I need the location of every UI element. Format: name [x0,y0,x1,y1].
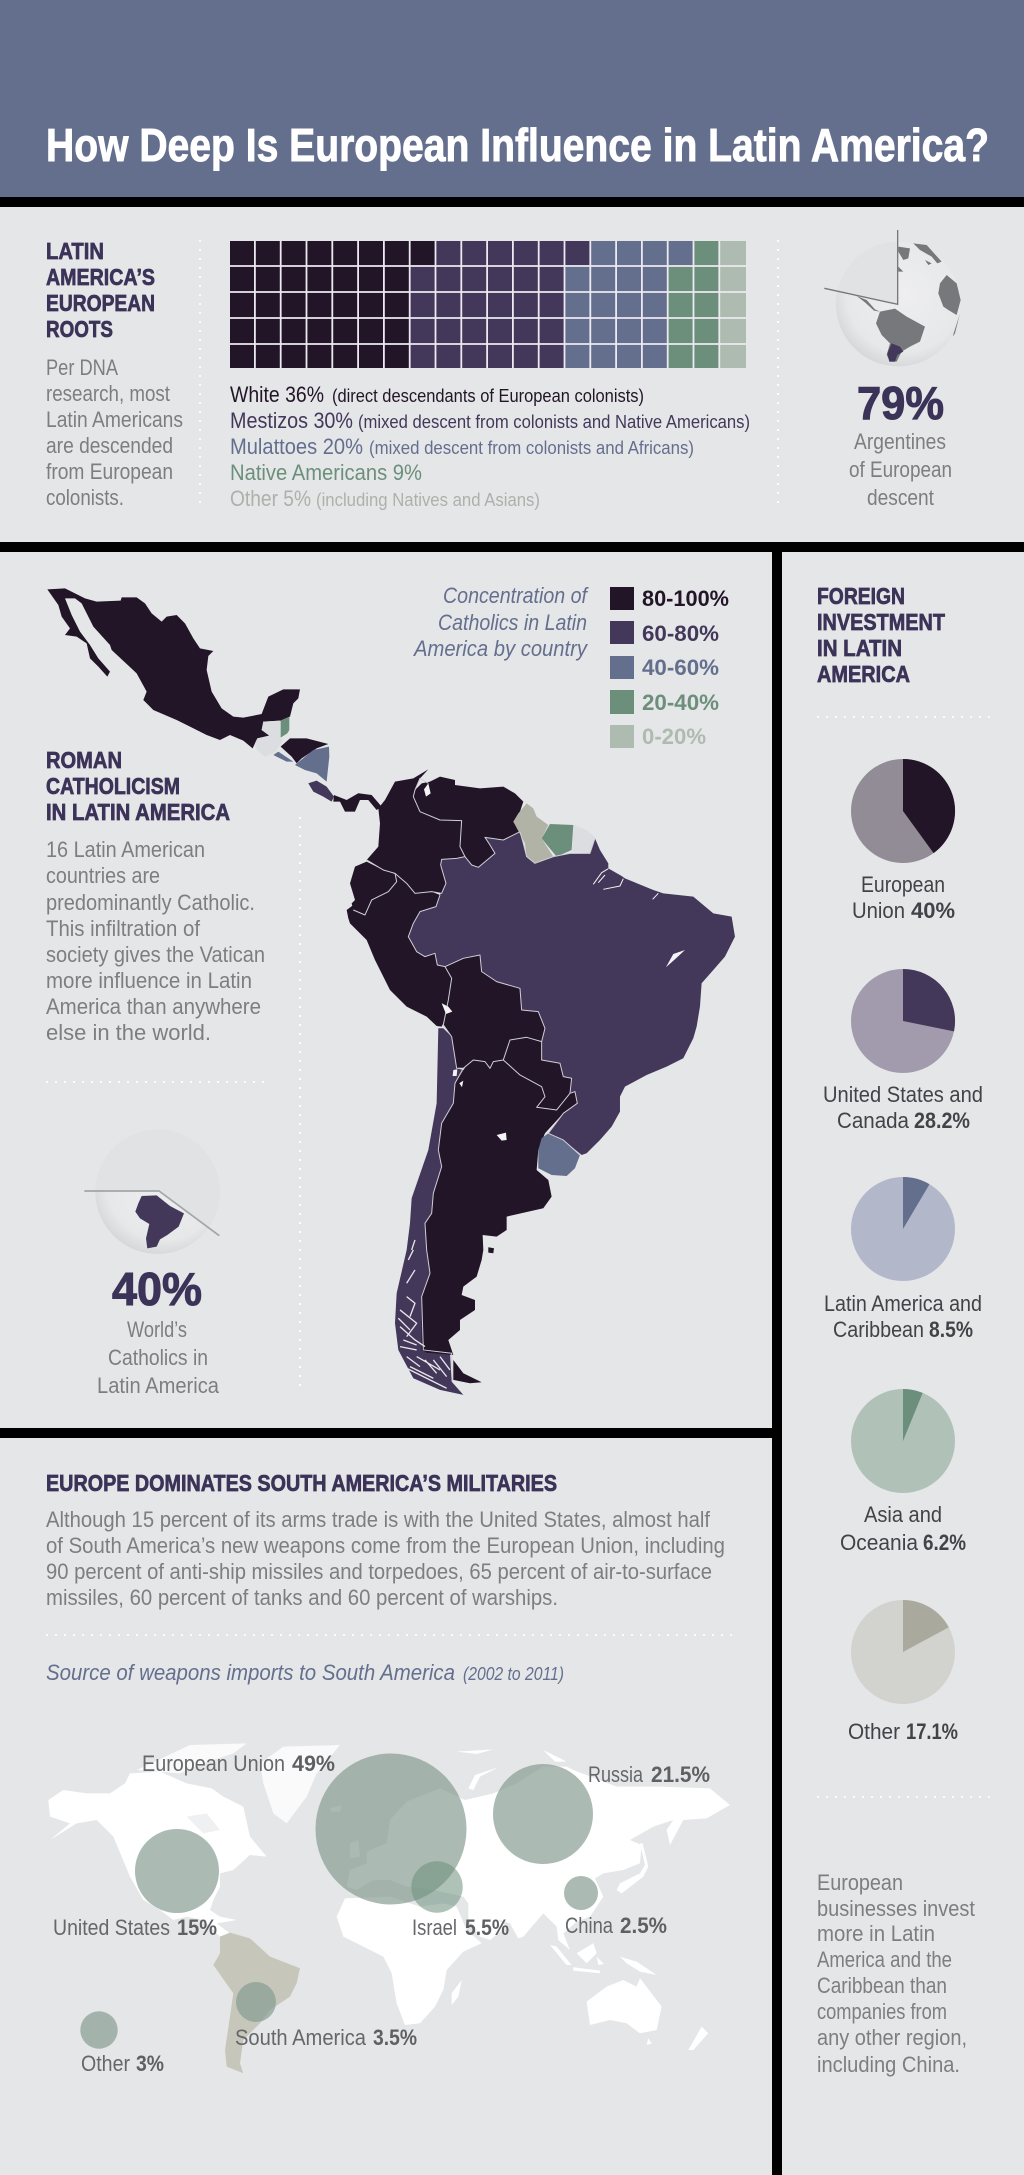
bubble labels [53,1751,710,2076]
stat: 40 percent: World’s [127,1317,187,1342]
heading: Roman Catholicism [46,747,230,825]
chart caption: (2002 to 2011) [463,1664,564,1684]
bubble labels: 2.5% [620,1913,667,1938]
pie: European Union 40% [851,759,955,923]
text: European businesses: companies from [817,1999,947,2024]
text: Catholic countries [46,837,265,1045]
bubble labels: Russia [588,1762,644,1787]
heading: foreign investment: IN LATIN [817,635,902,661]
legend: Catholic concentration: 80-100% [642,586,729,611]
text: European businesses: businesses invest [817,1896,975,1921]
stat: 79 percent [849,377,952,510]
map: South America [347,769,735,1395]
pie: European Union 40%: European [861,872,945,897]
text: European businesses: more in Latin [817,1921,935,1946]
pie: Asia and Oceania 6.2%: Oceania [840,1530,919,1555]
panel: militaries [46,1470,738,2076]
panel: foreign investment [817,583,990,2077]
text: DNA research: Latin Americans [46,407,183,432]
bubble labels: 15% [177,1915,217,1940]
heading: foreign investment: AMERICA [817,661,910,687]
legend: ancestry groups: (including Natives and Asians) [316,490,540,510]
text: DNA research: from European [46,459,173,484]
stat: 79 percent: of European [849,457,952,482]
bubble labels: European Union [142,1751,285,1776]
bubble map: weapons imports [48,1743,730,2076]
legend: Catholic concentration: 40-60% [642,655,719,680]
map: Americas [48,1743,340,2073]
text: DNA research: Per DNA [46,355,118,380]
pie: Other 17.1%: 17.1% [906,1719,958,1744]
bubble labels: Other [81,2051,130,2076]
pie: Latin America and Caribbean 8.5%: 8.5% [929,1317,973,1342]
heading: Europe dominates: EUROPE DOMINATES SOUTH AMERICA’S MILITARIES [46,1470,557,1496]
waffle chart: ancestry shares [230,241,746,368]
legend: Catholic concentration: 60-80% [642,621,719,646]
heading: Latin America's European roots: EUROPEAN [46,290,155,316]
text: Catholic countries: countries are [46,863,160,888]
legend: ancestry groups: Mestizos 30% [230,408,353,433]
stat: 40 percent: Catholics in [108,1345,208,1370]
text: DNA research: research, most [46,381,170,406]
text: arms trade: Although 15 percent of its arms trade is with the United States, almost half [46,1507,711,1532]
heading: Latin America's European roots [46,238,155,342]
icon: globe highlighting South America [84,1190,220,1254]
map: Mexico and Central America [47,588,382,812]
heading: Roman Catholicism: ROMAN [46,747,122,773]
text: European businesses: Caribbean than [817,1973,947,1998]
legend: ancestry groups: Native Americans 9% [230,460,422,485]
legend: ancestry groups: Other 5% [230,486,311,511]
heading: Latin America's European roots: AMERICA’S [46,264,155,290]
pie: United States and Canada 28.2%: 28.2% [914,1108,970,1133]
legend: ancestry groups: (direct descendants of European colonists) [332,386,644,406]
text: Catholic countries: predominantly Catholic. [46,890,255,915]
country borders [353,778,595,1382]
panel: European roots [46,230,961,511]
text: Catholic countries: This infiltration of [46,916,201,941]
text: Catholic countries: more influence in Latin [46,968,252,993]
map: Eurasia, Africa and Oceania [330,1749,730,2050]
text: Catholic countries: society gives the Vatican [46,942,265,967]
text: Catholic countries: 16 Latin American [46,837,205,862]
bubble labels: United States [53,1915,170,1940]
header band [0,0,1024,197]
text: Catholic countries: else in the world. [46,1020,211,1045]
heading: foreign investment: FOREIGN [817,583,905,609]
legend: Catholic concentration: 20-40% [642,690,719,715]
pie: United States and Canada 28.2% [823,969,983,1133]
legend: ancestry groups: White 36% [230,382,324,407]
text: Catholic countries: America than anywhere [46,994,261,1019]
legend caption: America by country [412,636,589,661]
chart caption: Source of weapons imports to South America [46,1660,455,1685]
pie: European Union 40%: Union [852,898,905,923]
text: European businesses: America and the [817,1947,952,1972]
panel: Roman Catholicism [46,583,735,1398]
bubble labels: 21.5% [651,1762,710,1787]
pie: Latin America and Caribbean 8.5% [824,1177,982,1342]
stat: 79 percent: descent [867,485,934,510]
pie: European Union 40%: 40% [911,898,955,923]
pie: Latin America and Caribbean 8.5%: Latin America and [824,1291,982,1316]
bubble labels: South America [235,2025,367,2050]
heading: Latin America's European roots: ROOTS [46,316,113,342]
pie: Other 17.1%: Other [848,1719,900,1744]
text: arms trade: of South America’s new weapons come from the European Union, including [46,1533,725,1558]
bubble labels: 3.5% [373,2025,417,2050]
heading: foreign investment [817,583,945,687]
legend caption [412,583,590,661]
heading: Roman Catholicism: IN LATIN AMERICA [46,799,230,825]
text: arms trade [46,1507,725,1610]
legend: ancestry groups: (mixed descent from colonists and Africans) [369,438,694,458]
pie: Latin America and Caribbean 8.5%: Caribbean [833,1317,924,1342]
pie: Asia and Oceania 6.2%: Asia and [864,1502,942,1527]
text: European businesses: European [817,1870,903,1895]
heading: Roman Catholicism: CATHOLICISM [46,773,180,799]
text: European businesses: including China. [817,2052,960,2077]
bubble labels: 5.5% [465,1915,509,1940]
bubble labels: Israel [412,1915,457,1940]
pie: Asia and Oceania 6.2% [840,1389,966,1555]
pie: Asia and Oceania 6.2%: 6.2% [923,1530,966,1555]
icon: globe highlighting Argentina [824,230,961,366]
text: DNA research: colonists. [46,485,124,510]
stat: 79 percent: Argentines [854,429,946,454]
text: DNA research: are descended [46,433,173,458]
heading: foreign investment: INVESTMENT [817,609,945,635]
pie: Other 17.1% [848,1600,958,1744]
stat: 40 percent: Latin America [97,1373,220,1398]
bubbles [80,1754,598,2049]
bubble labels: China [565,1913,614,1938]
lakes and fjords [424,783,685,1141]
pie: United States and Canada 28.2%: Canada [837,1108,910,1133]
bubble labels: 49% [292,1751,335,1776]
stat: 40 percent: 40% [112,1263,202,1315]
pie: United States and Canada 28.2%: United States and [823,1082,983,1107]
legend: Catholic concentration: 0-20% [642,724,706,749]
text: arms trade: 90 percent of anti-ship missiles and torpedoes, 65 percent of air-to-surface [46,1559,712,1584]
text: arms trade: missiles, 60 percent of tanks and 60 percent of warships. [46,1585,558,1610]
legend: ancestry groups: (mixed descent from colonists and Native Americans) [358,412,750,432]
text: European businesses [817,1870,975,2077]
legend: ancestry groups [230,382,750,511]
stat: 40 percent [97,1263,220,1398]
legend caption: Catholics in Latin [438,610,587,635]
legend: ancestry groups: Mulattoes 20% [230,434,363,459]
legend caption: Concentration of [443,583,590,608]
stat: 79 percent: 79% [857,377,944,429]
legend: Catholic concentration [412,583,729,749]
text: DNA research [46,355,183,510]
text: European businesses: any other region, [817,2025,967,2050]
heading: Latin America's European roots: LATIN [46,238,104,264]
bubble labels: 3% [136,2051,164,2076]
